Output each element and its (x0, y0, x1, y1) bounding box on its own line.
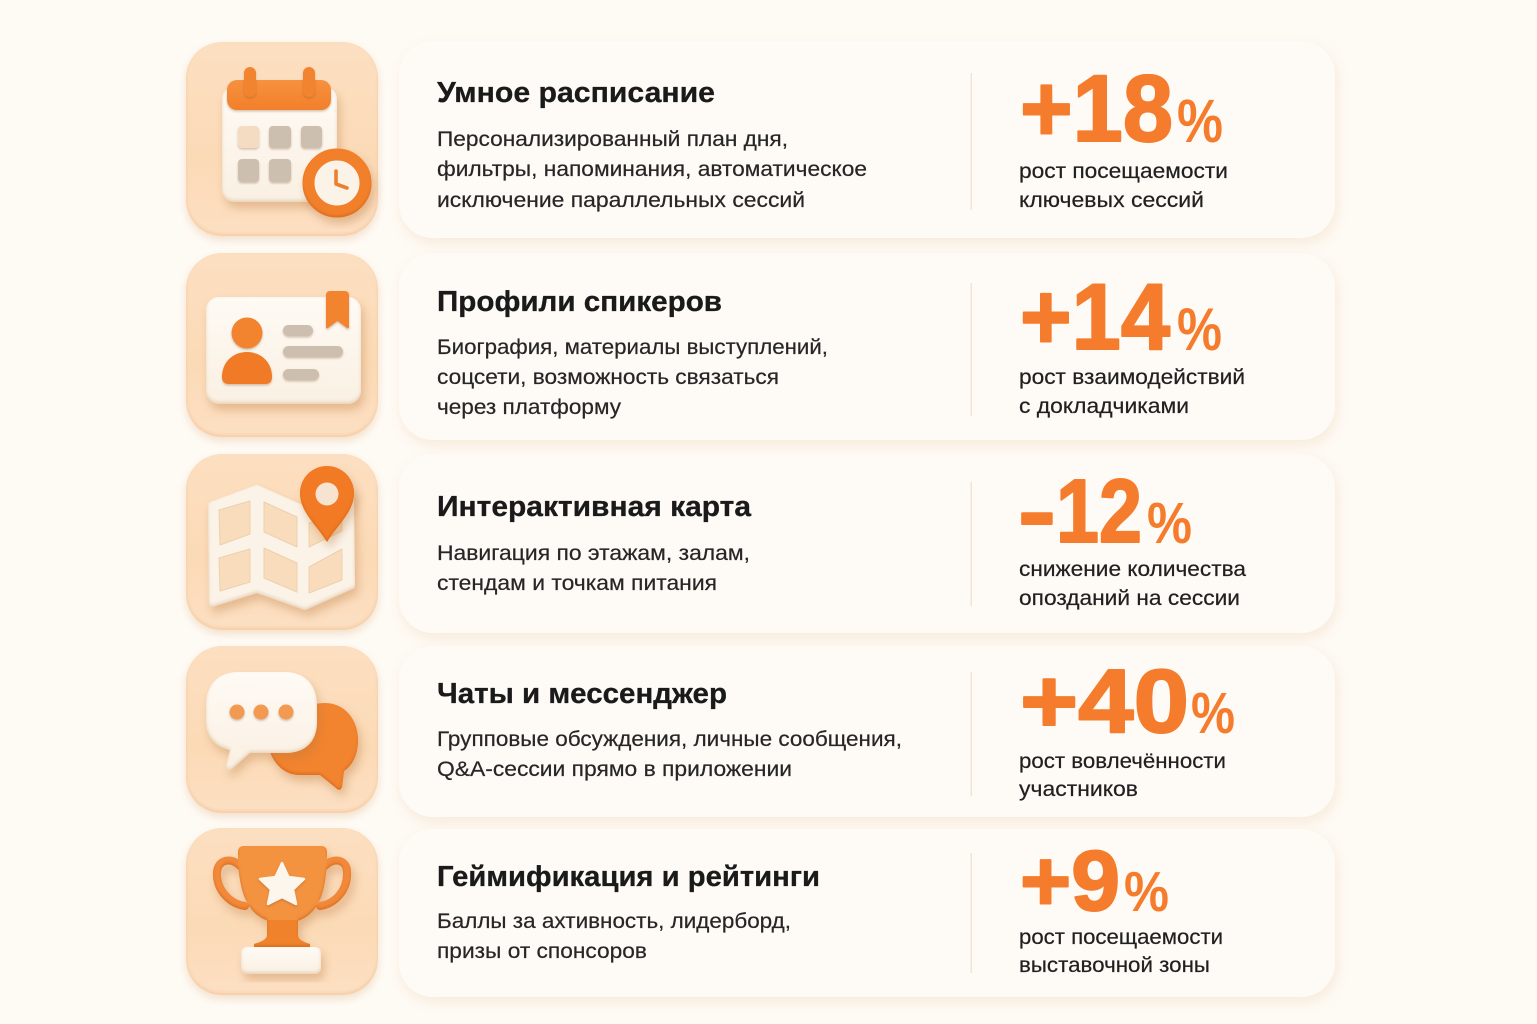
description: через платформу (437, 396, 622, 419)
metric +40%: % (1191, 681, 1235, 746)
icon tile: chat bubbles (186, 646, 378, 813)
heading: Интерактивная карта (437, 491, 752, 523)
metric caption (1019, 750, 1226, 801)
metric -12%: - (1018, 462, 1056, 562)
metric caption (1019, 160, 1228, 212)
description: Q&A-сессии прямо в приложении (437, 758, 792, 781)
heading: Чаты и мессенджер (437, 678, 727, 710)
metric caption: рост посещаемости (1019, 926, 1223, 949)
metric caption: рост взаимодействий (1019, 366, 1245, 389)
metric +9%: % (1124, 860, 1169, 924)
description (437, 336, 828, 419)
metric +9%: +9 (1020, 834, 1120, 929)
description: Групповые обсуждения, личные сообщения, (437, 728, 902, 751)
icon tile: trophy (186, 828, 378, 995)
metric -12% (1018, 462, 1192, 562)
row 3: interactive map (186, 454, 1335, 633)
metric caption (1019, 926, 1223, 977)
description: призы от спонсоров (437, 940, 647, 963)
row 5: gamification (186, 828, 1335, 997)
row 2: speaker profiles (186, 253, 1335, 440)
metric caption: выставочной зоны (1019, 954, 1210, 977)
heading: Геймификация и рейтинги (437, 861, 820, 893)
row 4: chats (186, 646, 1335, 817)
card: interactive map (399, 454, 1335, 633)
description (437, 728, 902, 781)
icon tile: map with pin (186, 454, 378, 630)
metric caption: ключевых сессий (1019, 189, 1204, 212)
description: Баллы за ахтивность, лидерборд, (437, 910, 791, 933)
icon tile: profile card (186, 253, 378, 437)
metric +14%: % (1177, 296, 1222, 363)
heading: Профили спикеров (437, 286, 722, 318)
description: соцсети, возможность связаться (437, 366, 779, 389)
card: chats (399, 646, 1335, 817)
metric caption (1019, 366, 1245, 418)
heading: Умное расписание (437, 77, 715, 109)
metric +14%: +14 (1020, 264, 1170, 369)
description: исключение параллельных сессий (437, 189, 805, 212)
metric +18%: % (1177, 87, 1223, 155)
card: smart schedule (399, 41, 1335, 238)
metric caption: с докладчиками (1019, 395, 1189, 418)
description: фильтры, напоминания, автоматическое (437, 158, 867, 181)
metric caption: рост посещаемости (1019, 160, 1228, 183)
metric -12%: 12 (1056, 462, 1142, 562)
row 1: smart schedule (186, 41, 1335, 238)
metric caption: опозданий на сессии (1019, 587, 1240, 610)
card: gamification (399, 829, 1335, 997)
metric caption: рост вовлечённости (1019, 750, 1226, 773)
icon tile: calendar with clock (186, 42, 378, 236)
metric caption: участников (1019, 778, 1138, 801)
card: speaker profiles (399, 253, 1335, 440)
metric caption (1019, 558, 1246, 610)
description: Биография, материалы выступлений, (437, 336, 828, 359)
metric +40%: +40 (1020, 652, 1189, 752)
description: Персонализированный план дня, (437, 128, 788, 151)
metric caption: снижение количества (1019, 558, 1246, 581)
description (437, 128, 867, 212)
description: стендам и точкам питания (437, 572, 717, 595)
description: Навигация по этажам, залам, (437, 542, 750, 565)
metric +18%: +18 (1020, 56, 1173, 162)
metric -12%: % (1147, 491, 1192, 556)
metric +9% (1020, 834, 1169, 929)
description (437, 542, 750, 595)
description (437, 910, 791, 963)
